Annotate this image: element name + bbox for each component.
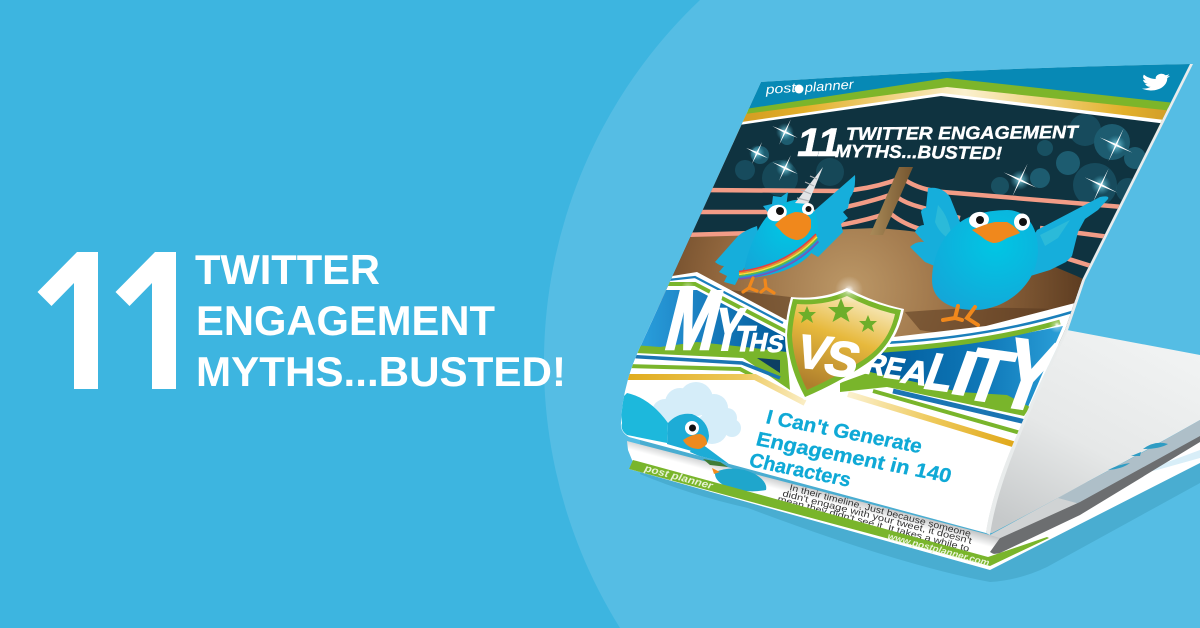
word MYTHS: M	[658, 273, 731, 367]
footer url: www.postplanner.com	[886, 531, 991, 569]
banner: myths vs reality	[620, 272, 1076, 445]
section heading	[747, 407, 954, 492]
left green wedge	[634, 342, 790, 390]
sparkles	[746, 120, 1132, 200]
bird arm	[690, 440, 733, 467]
word MYTHS: T	[731, 319, 759, 360]
bird wing	[620, 393, 668, 443]
inner back cover	[985, 330, 1200, 533]
corner post	[870, 167, 913, 235]
banner white backing	[630, 272, 1074, 426]
left wing feathers	[935, 206, 950, 236]
word REALITY: I	[942, 338, 988, 410]
floor shadow	[730, 290, 1050, 332]
gold chevron stripe	[734, 87, 1167, 140]
headline text: ENGAGEMENT	[196, 297, 495, 344]
shield text VS: S	[818, 330, 867, 389]
left dark triangle	[757, 358, 780, 373]
section heading: Characters	[747, 450, 853, 492]
legs	[743, 278, 774, 293]
left lower stripes	[622, 356, 805, 403]
word REALITY	[861, 316, 1076, 434]
front cover	[620, 64, 1190, 533]
twitter icon	[1142, 74, 1170, 90]
left wing	[715, 226, 762, 285]
ring floor	[650, 228, 1110, 345]
right wing	[1032, 196, 1108, 276]
body copy: didn't engage with your tweet, it doesn't	[782, 488, 974, 546]
word MYTHS	[658, 273, 786, 367]
right green wedge	[840, 372, 1030, 416]
unicorn bird	[715, 167, 855, 293]
shield sparkle	[681, 276, 1065, 333]
headline text	[195, 246, 566, 395]
corner bird with cloud	[620, 382, 741, 467]
headline text: TWITTER	[195, 246, 380, 293]
bokeh lights	[735, 114, 1146, 207]
crest	[763, 192, 788, 212]
footer logo: post planner	[642, 463, 715, 492]
shield text VS: V	[790, 325, 838, 380]
magazine mockup	[600, 50, 1200, 582]
left blue panel	[634, 290, 787, 354]
headline text: MYTHS...BUSTED!	[196, 348, 566, 395]
word MYTHS: H	[747, 329, 771, 357]
right wing	[806, 175, 855, 257]
body copy	[776, 482, 974, 554]
word REALITY: Y	[982, 316, 1076, 434]
word REALITY: E	[879, 352, 909, 386]
beak	[972, 222, 1020, 243]
large light circle backdrop	[544, 0, 1200, 628]
word REALITY: L	[917, 342, 965, 403]
inner gray underside	[990, 482, 1087, 542]
post planner logo: planner	[803, 77, 855, 95]
bird eye	[685, 421, 699, 435]
right blue panel	[866, 326, 1063, 407]
night arena backdrop	[660, 96, 1200, 300]
word MYTHS: Y	[708, 297, 749, 364]
inner page strip	[1058, 420, 1200, 504]
cloud	[652, 382, 741, 444]
curled page with text	[627, 441, 1000, 562]
back sheet	[629, 436, 1200, 570]
body copy: mean they didn't see it. It takes a while to	[776, 494, 971, 554]
shield stars	[798, 298, 877, 332]
dark spine band	[988, 436, 1200, 554]
right top stripes	[883, 312, 1072, 350]
horn	[795, 167, 823, 204]
body copy: In their timeline. Just because someone	[788, 482, 972, 539]
body	[743, 200, 818, 279]
word REALITY: R	[861, 349, 892, 383]
title on cover: 11	[797, 121, 841, 165]
word MYTHS: S	[765, 331, 786, 358]
left top stripes	[664, 277, 787, 332]
section heading: Engagement in 140	[754, 429, 954, 488]
round bird	[910, 188, 1108, 325]
title on cover	[797, 125, 1080, 160]
section heading: I Can't Generate	[764, 407, 925, 458]
header band	[748, 64, 1190, 110]
body	[932, 210, 1038, 310]
green footer strip	[629, 460, 1049, 569]
right wing feathers	[1040, 220, 1070, 246]
shield text VS	[790, 325, 867, 389]
white chevron stripe	[732, 93, 1162, 145]
lower light page	[1130, 450, 1200, 476]
blue bird fragment	[703, 459, 766, 491]
rainbow sash	[739, 234, 818, 279]
word REALITY: T	[953, 332, 1024, 420]
right lower stripes	[848, 391, 1030, 445]
post planner logo	[766, 82, 854, 97]
green chevron stripe	[734, 78, 1171, 140]
shield	[785, 288, 904, 400]
bird body	[667, 414, 709, 452]
big number 11	[38, 252, 176, 389]
legs	[943, 306, 978, 325]
bird beak	[683, 434, 707, 449]
eyes	[968, 210, 1030, 230]
title on cover: MYTHS...BUSTED!	[835, 141, 1002, 163]
cover edge	[986, 64, 1193, 535]
beak	[775, 212, 811, 240]
post planner logo: post	[764, 80, 798, 97]
headline block	[38, 246, 566, 395]
ring ropes	[680, 180, 1135, 272]
title on cover: TWITTER ENGAGEMENT	[846, 122, 1080, 144]
word REALITY: A	[896, 353, 935, 393]
drop shadow	[640, 440, 1200, 582]
eyes	[767, 203, 814, 222]
left wing	[910, 188, 962, 267]
cover base	[620, 64, 1190, 533]
